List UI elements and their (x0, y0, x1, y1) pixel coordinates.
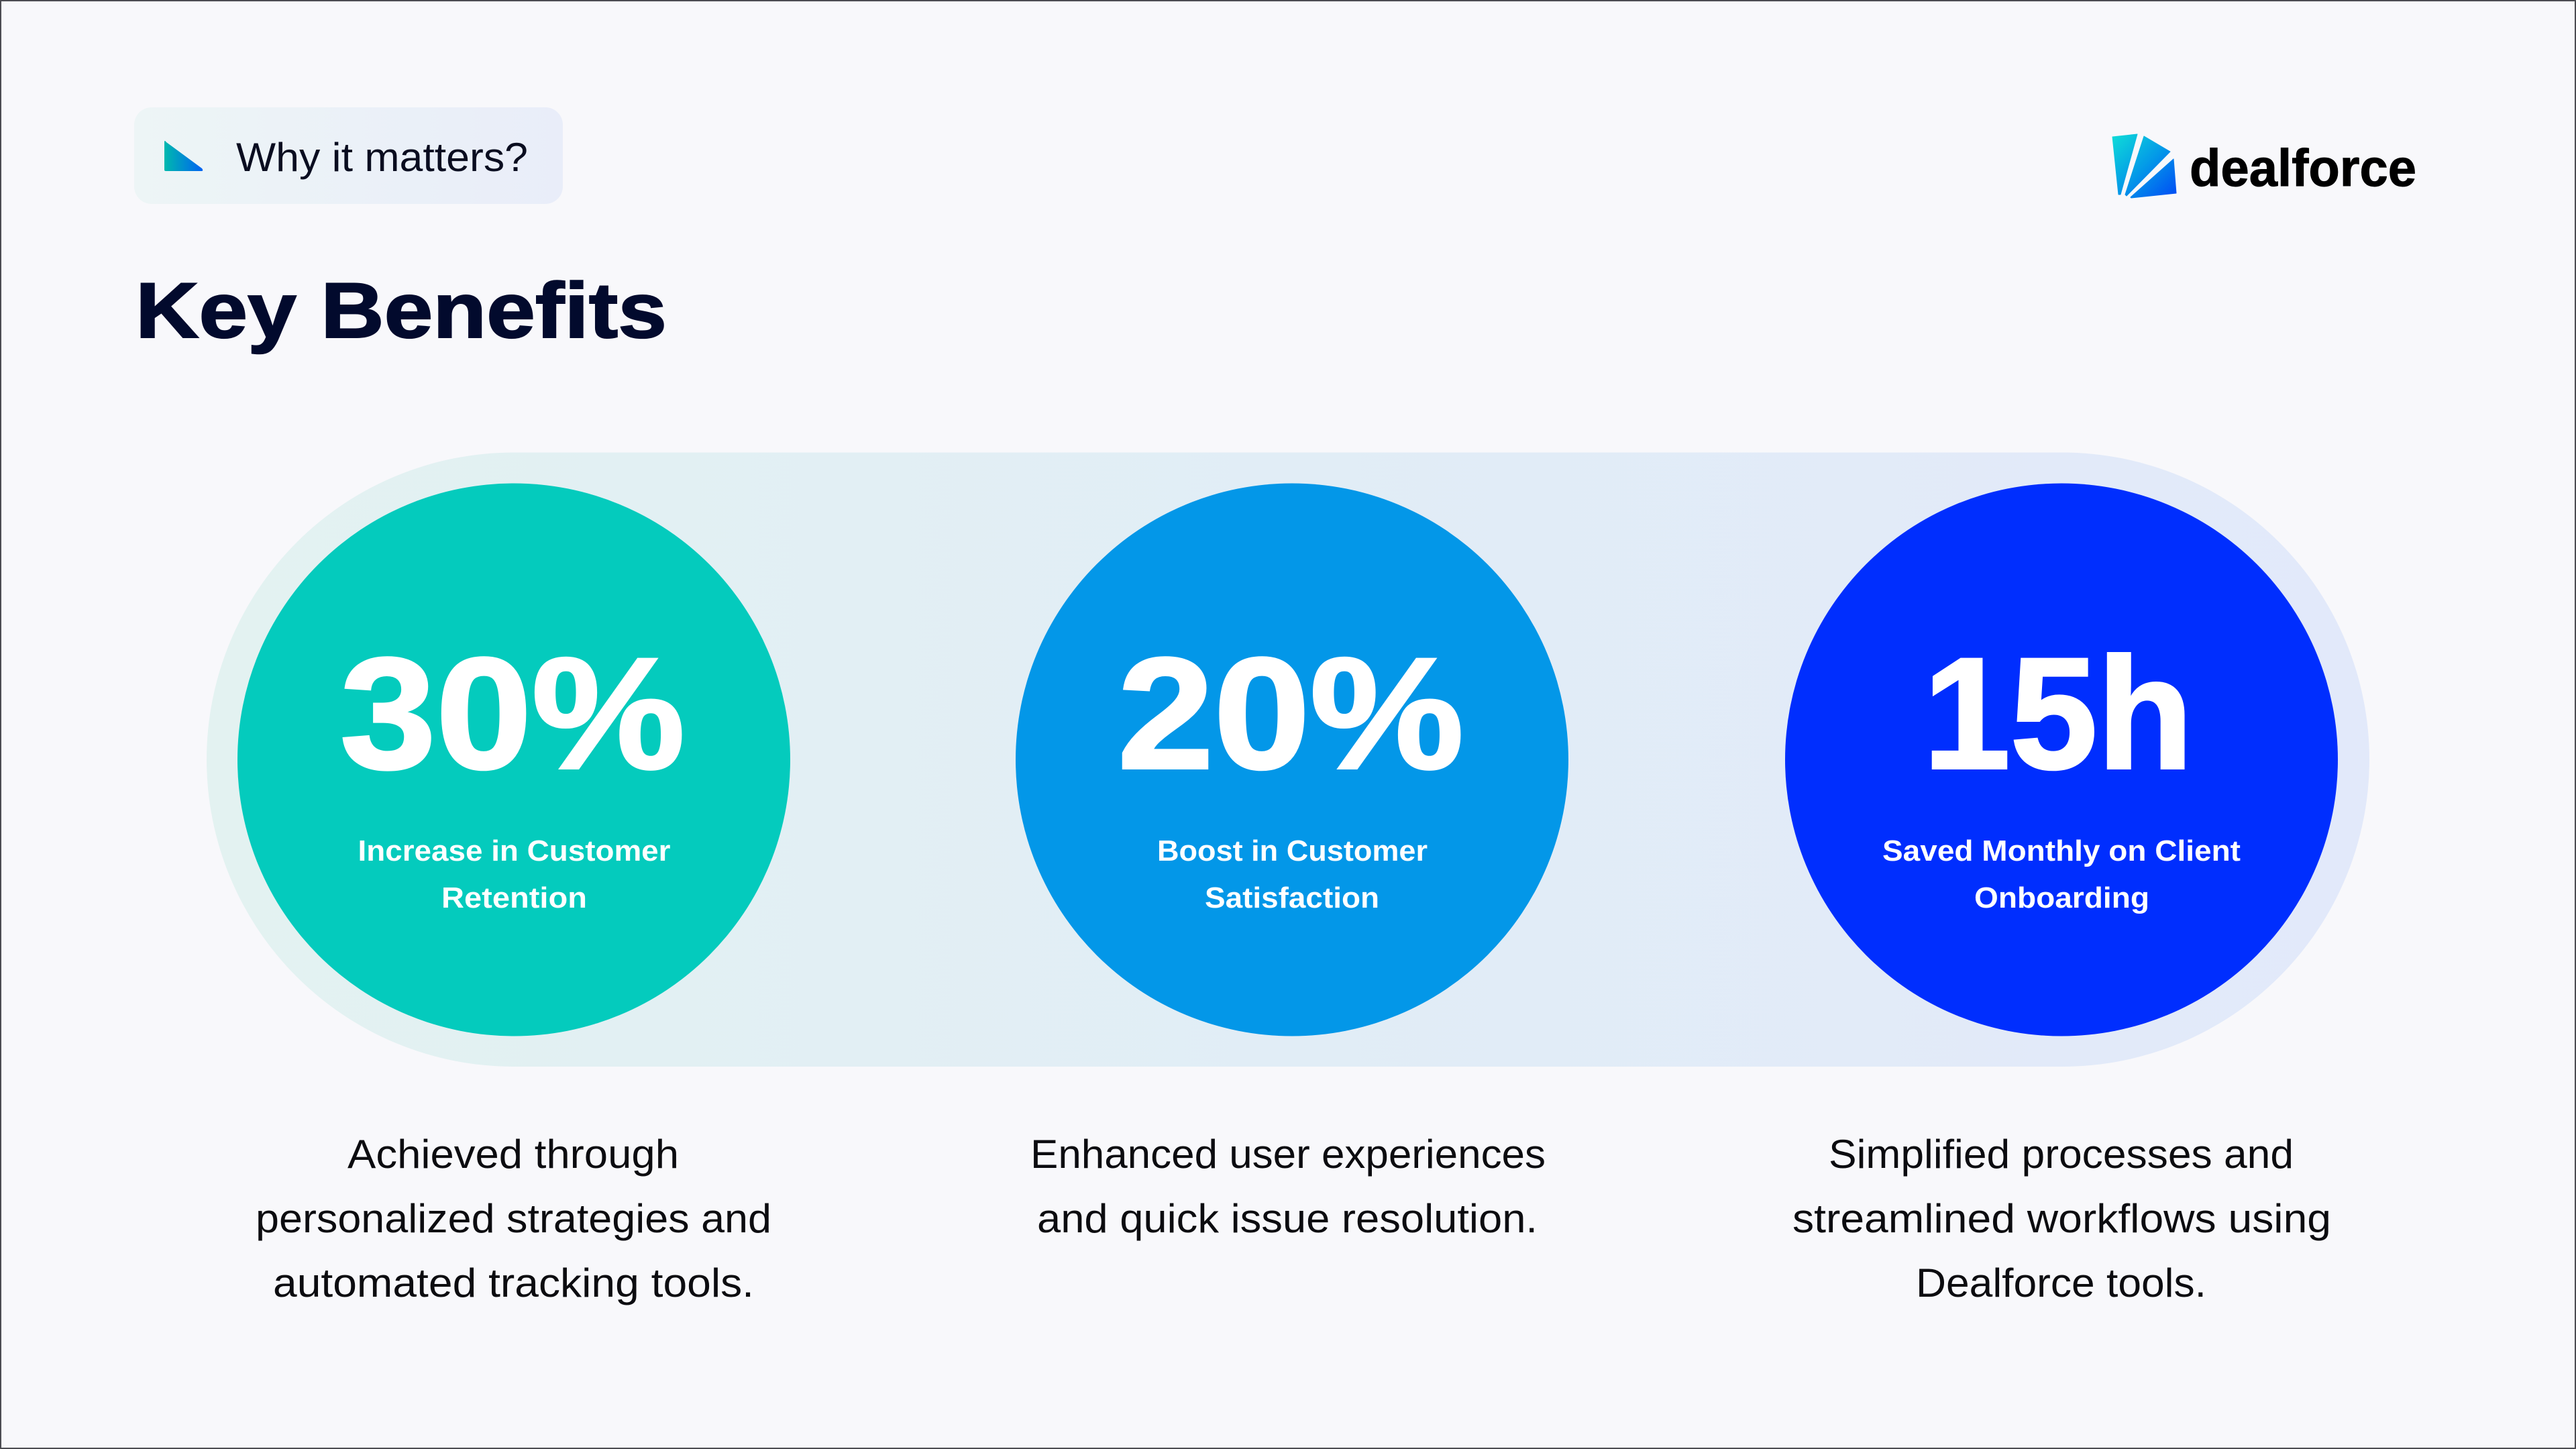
logo wordmark: dealforce (2190, 138, 2416, 197)
badge: why it matters (134, 107, 563, 204)
stat label: Saved Monthly on Client (1882, 835, 2241, 867)
badge label: Why it matters? (236, 135, 528, 180)
stat label: Satisfaction (1205, 881, 1379, 914)
description: retention: automated tracking tools. (273, 1260, 754, 1305)
stat number: 20% (1118, 625, 1464, 802)
icon: gradient triangle (164, 141, 203, 171)
stat circle: 20% (1016, 483, 1568, 1036)
description: retention (256, 1132, 771, 1305)
description: onboarding: Simplified processes and (1829, 1132, 2294, 1177)
stat label (1882, 835, 2241, 914)
description: onboarding: streamlined workflows using (1792, 1196, 2331, 1241)
logo: dealforce (2112, 134, 2416, 198)
description: retention: Achieved through (347, 1132, 679, 1177)
stat circle: 30% (237, 483, 790, 1036)
description: satisfaction: and quick issue resolution. (1037, 1196, 1538, 1241)
description: satisfaction: Enhanced user experiences (1030, 1132, 1546, 1177)
stat number: 15h (1923, 625, 2193, 802)
stat label (1157, 835, 1428, 914)
stat number: 30% (340, 625, 685, 802)
description: onboarding (1792, 1132, 2331, 1305)
stat label: Retention (441, 881, 587, 914)
logo mark (2112, 134, 2176, 198)
panel: capsule band (207, 452, 2369, 1067)
stat label: Boost in Customer (1157, 835, 1428, 867)
description: retention: personalized strategies and (256, 1196, 771, 1241)
stat label: Onboarding (1974, 881, 2149, 914)
stat circle: 15h (1785, 483, 2338, 1036)
stat label (358, 835, 671, 914)
description: onboarding: Dealforce tools. (1916, 1260, 2206, 1305)
stat label: Increase in Customer (358, 835, 671, 867)
description: satisfaction (1030, 1132, 1546, 1241)
title: Key Benefits (136, 266, 667, 354)
